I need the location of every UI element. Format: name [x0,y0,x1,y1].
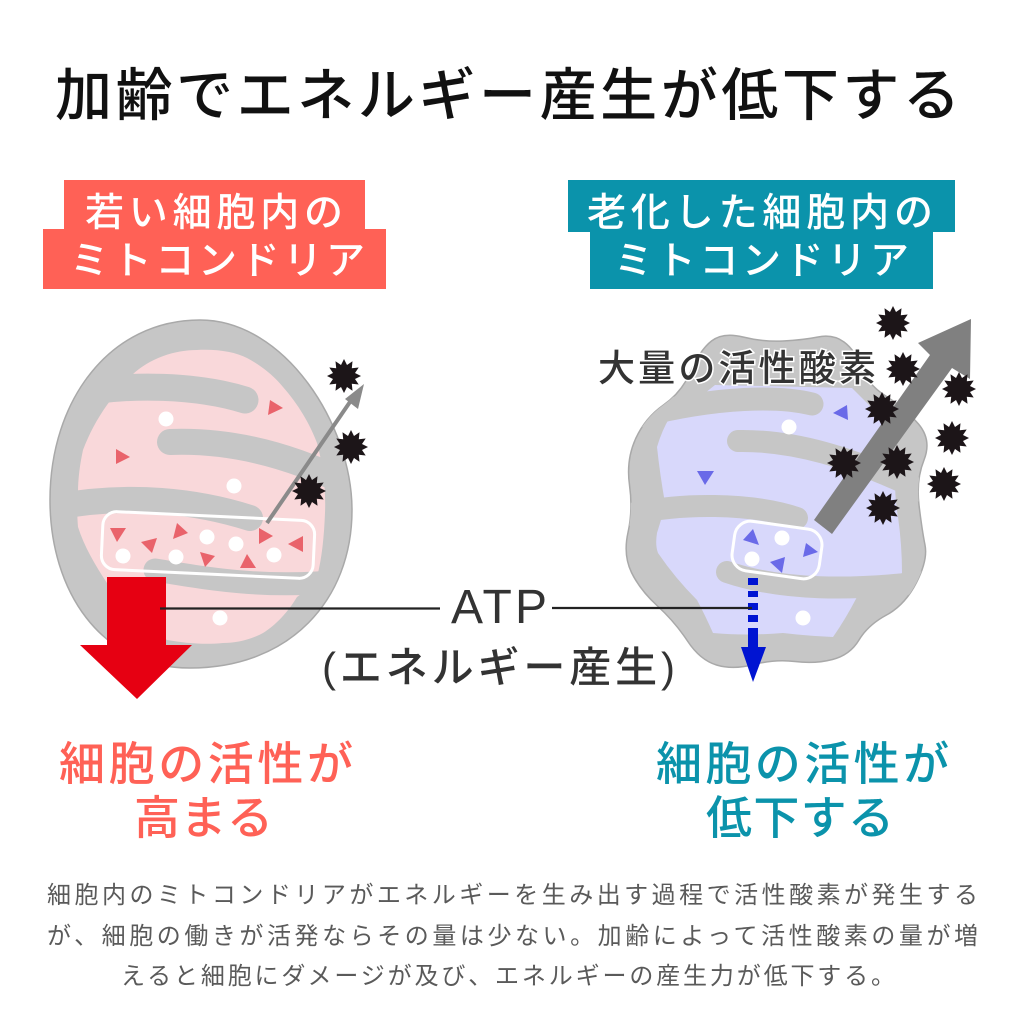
explanatory paragraph: えると細胞にダメージが及び、エネルギーの産生力が低下する。 [121,963,895,990]
ROS stars [292,359,368,508]
red ATP arrow [80,577,192,699]
right result text [656,738,949,844]
particles [697,405,848,573]
left result text [59,738,353,844]
explanatory paragraph: 細胞内のミトコンドリアがエネルギーを生み出す過程で活性酸素が発生する [47,882,978,909]
ROS stars [827,306,976,525]
young mitochondrion diagram [50,320,368,668]
blue dashed ATP arrow [741,578,766,682]
outer membrane [626,335,927,667]
outer membrane [50,320,352,668]
cristae [615,399,940,588]
ATP connector lines [160,607,752,610]
left heading badge [43,180,386,289]
right heading badge: ミトコンドリア [614,240,909,283]
explanatory paragraph: が、細胞の働きが活発ならその量は少ない。加齢によって活性酸素の量が増 [47,923,978,950]
aged mitochondrion diagram [615,306,976,667]
right result text: 低下する [706,792,894,844]
right heading badge [568,180,955,289]
label: large amount of active oxygen: 大量の活性酸素 [598,348,876,389]
active oxygen arrow [814,319,971,534]
ATP label [322,581,675,691]
ATP label: ATP [451,581,547,634]
ATP label: (エネルギー産生) [322,644,675,691]
cristae [50,387,350,584]
left heading badge: ミトコンドリア [70,240,365,283]
right result text: 細胞の活性が [656,738,949,790]
left result text: 高まる [134,792,273,844]
active oxygen arrow [267,384,364,523]
matrix [77,350,325,644]
highlight window [730,519,824,581]
matrix [656,385,902,637]
left heading badge: 若い細胞内の [85,192,343,235]
right heading badge: 老化した細胞内の [587,192,933,235]
highlight window [101,511,315,579]
title: 加齢でエネルギー産生が低下する [55,64,960,128]
explanatory paragraph [47,882,978,990]
left result text: 細胞の活性が [59,738,353,790]
particles [110,400,303,568]
